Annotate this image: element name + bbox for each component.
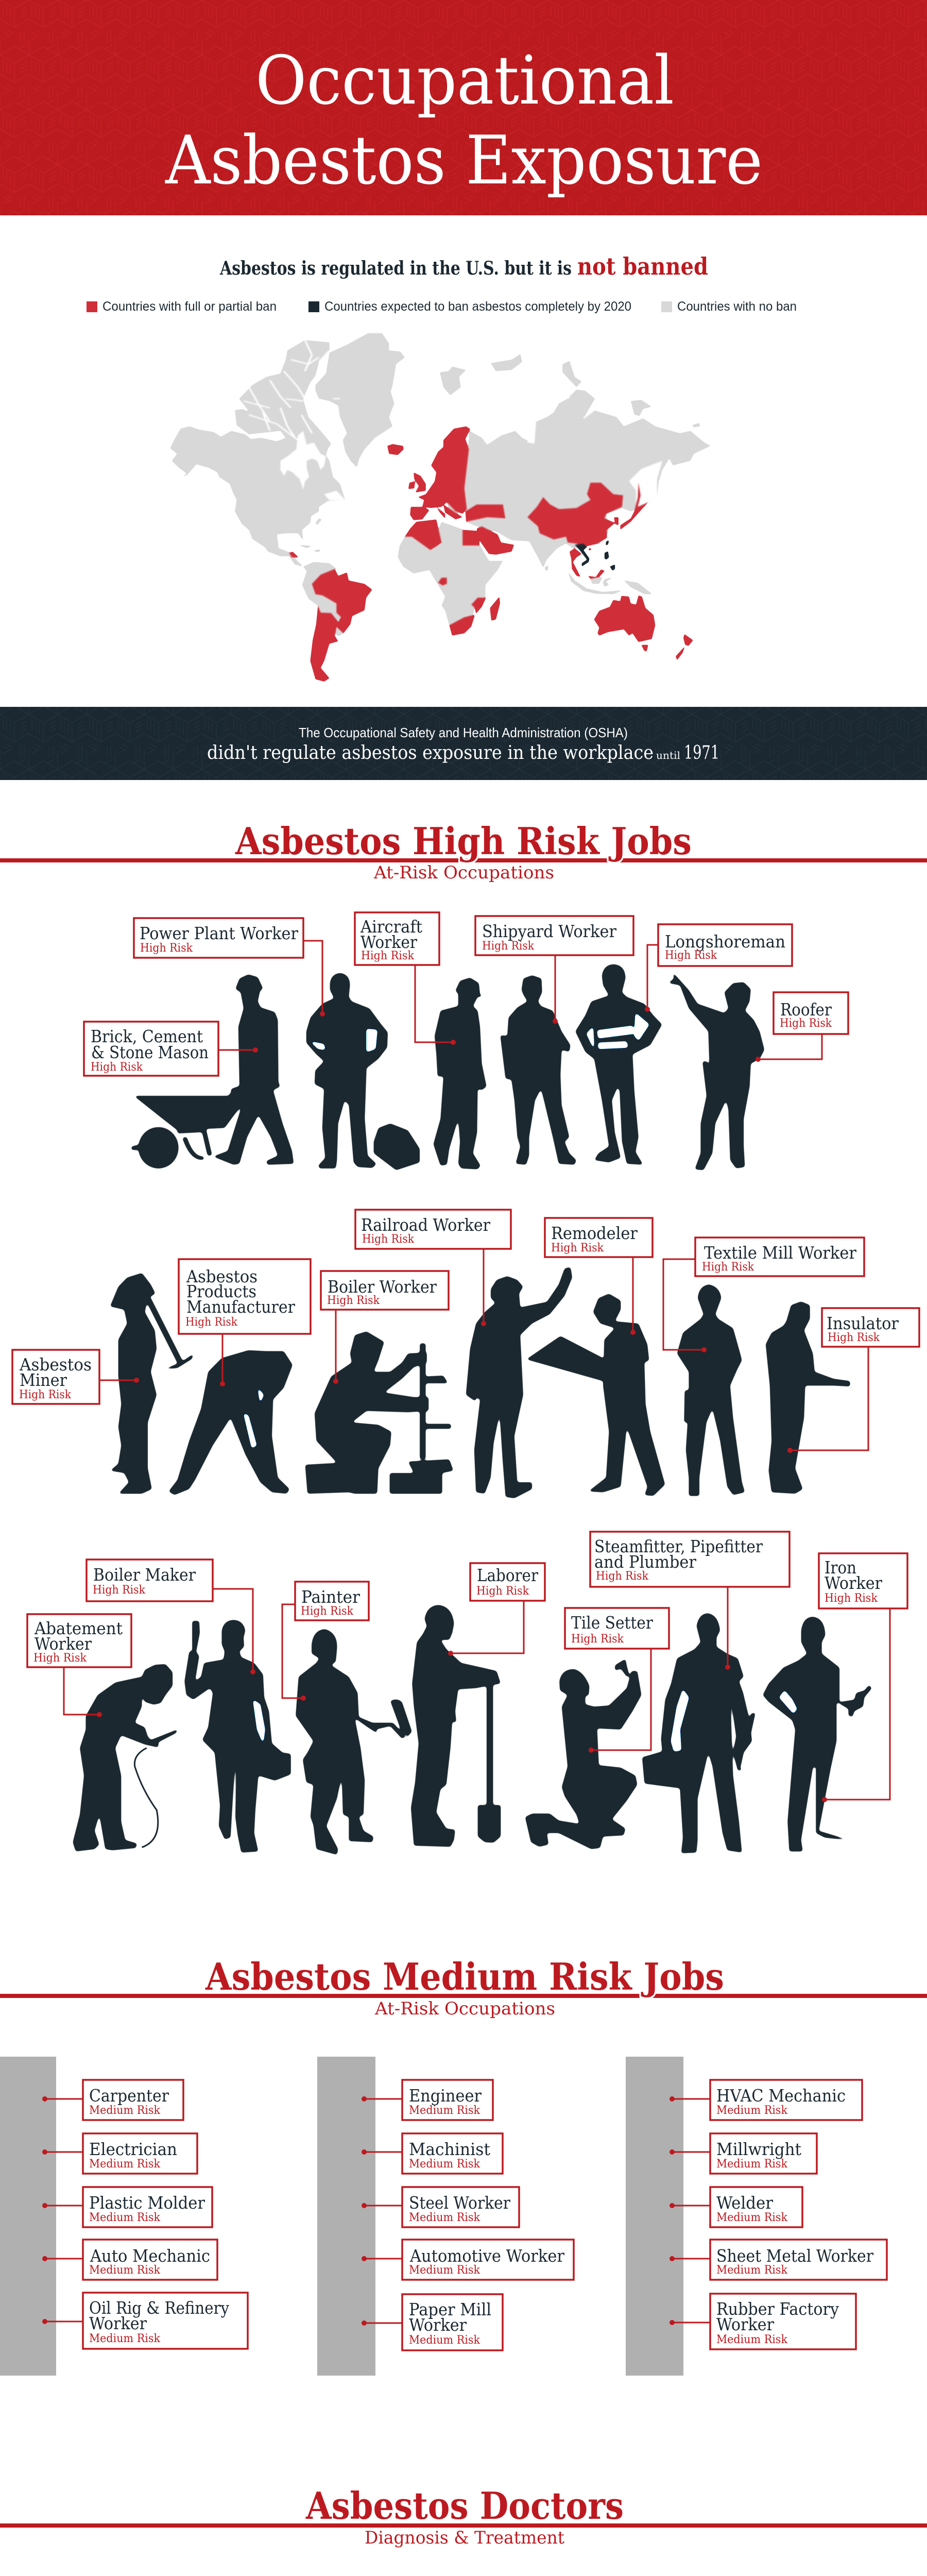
subheading: not banned: not banned bbox=[577, 252, 708, 280]
callout: carpenter: Carpenter bbox=[89, 2086, 169, 2106]
callout: shipyard worker: High Risk bbox=[482, 940, 535, 953]
callout: oil rig and refinery worker: Worker bbox=[89, 2313, 147, 2333]
icon: iron worker bbox=[763, 1617, 872, 1852]
section heading: high risk jobs bbox=[0, 819, 927, 883]
worker silhouettes row 3 bbox=[73, 1605, 872, 1855]
icon: laborer bbox=[411, 1605, 501, 1847]
callout: asbestos miner bbox=[12, 1350, 139, 1404]
section heading: medium risk jobs bbox=[0, 1955, 927, 2019]
section heading: high risk jobs: At-Risk Occupations bbox=[373, 862, 554, 883]
icon: products manufacturer bbox=[168, 1350, 293, 1495]
callout: carpenter bbox=[42, 2080, 183, 2120]
callout: boiler worker: Boiler Worker bbox=[328, 1277, 437, 1297]
callout: brick cement and stone mason: & Stone Mason bbox=[91, 1042, 209, 1062]
title: Asbestos Exposure bbox=[165, 121, 763, 199]
callout: aircraft worker: Worker bbox=[360, 932, 417, 952]
callout: asbestos miner: Asbestos bbox=[19, 1354, 92, 1375]
callout: paper mill worker: Paper Mill bbox=[409, 2299, 491, 2319]
callout: engineer: Engineer bbox=[409, 2086, 482, 2106]
callout: tile setter: Tile Setter bbox=[571, 1613, 653, 1633]
callout: railroad worker bbox=[355, 1210, 511, 1326]
panel: medium risk column 1 bbox=[0, 2057, 248, 2376]
callout: hvac mechanic: Medium Risk bbox=[716, 2104, 788, 2117]
callout: auto mechanic: Auto Mechanic bbox=[90, 2246, 210, 2266]
title bbox=[165, 41, 763, 199]
callout: steel worker: Medium Risk bbox=[409, 2211, 480, 2224]
callout: roofer bbox=[756, 992, 848, 1062]
OSHA banner: 1971 bbox=[684, 742, 719, 764]
callout: steamfitter pipefitter and plumber: and Plumber bbox=[594, 1552, 696, 1572]
callout: brick cement and stone mason: High Risk bbox=[91, 1061, 143, 1074]
callout: iron worker: Worker bbox=[825, 1573, 882, 1593]
callout: paper mill worker: Medium Risk bbox=[409, 2334, 480, 2347]
callout: brick cement and stone mason: Brick, Cement bbox=[91, 1026, 203, 1046]
callout: asbestos products manufacturer: High Risk bbox=[185, 1316, 238, 1329]
callout: remodeler bbox=[545, 1218, 653, 1335]
icon: power plant worker bbox=[306, 973, 388, 1168]
callout: asbestos products manufacturer: Products bbox=[186, 1281, 256, 1301]
callout: millwright: Medium Risk bbox=[716, 2158, 788, 2171]
callout: boiler maker: Boiler Maker bbox=[93, 1565, 196, 1585]
callout: hvac mechanic bbox=[670, 2080, 862, 2120]
callout: auto mechanic bbox=[42, 2240, 217, 2280]
panel: medium risk column 3 bbox=[626, 2057, 887, 2376]
callout: painter: High Risk bbox=[301, 1605, 354, 1618]
callout: welder: Welder bbox=[716, 2193, 773, 2213]
icon: boiler worker bbox=[305, 1331, 454, 1494]
callout: boiler maker: High Risk bbox=[93, 1584, 146, 1597]
callout: machinist: Medium Risk bbox=[409, 2158, 480, 2171]
callout: automotive worker bbox=[362, 2240, 574, 2280]
callout: roofer: High Risk bbox=[780, 1017, 832, 1030]
callout: asbestos products manufacturer: Manufacturer bbox=[186, 1297, 295, 1317]
callout: iron worker: Iron bbox=[825, 1557, 856, 1578]
callout: iron worker bbox=[819, 1553, 907, 1802]
panel: medium risk column 2 bbox=[317, 2057, 574, 2376]
callout: oil rig and refinery worker bbox=[42, 2293, 248, 2349]
icon: boiler maker bbox=[184, 1620, 291, 1853]
callout: steel worker: Steel Worker bbox=[409, 2193, 510, 2213]
callout: oil rig and refinery worker: Oil Rig & Refinery bbox=[89, 2298, 229, 2318]
callout: textile mill worker bbox=[663, 1238, 864, 1352]
callout: welder: Medium Risk bbox=[716, 2211, 788, 2224]
callout: boiler worker: High Risk bbox=[327, 1294, 380, 1307]
icon: painter bbox=[296, 1629, 412, 1855]
callout: brick cement and stone mason bbox=[84, 1022, 258, 1076]
section heading: medium risk jobs: Asbestos Medium Risk Jobs bbox=[205, 1955, 724, 1998]
icon: roofer bbox=[668, 972, 764, 1171]
map legend bbox=[87, 299, 797, 314]
callout: boiler worker bbox=[321, 1271, 449, 1384]
map legend: Countries with full or partial ban bbox=[102, 299, 277, 314]
icon: textile worker bbox=[677, 1284, 745, 1496]
OSHA banner: The Occupational Safety and Health Administration (OSHA) bbox=[299, 725, 628, 740]
callout: insulator: High Risk bbox=[828, 1331, 880, 1344]
callout: steamfitter pipefitter and plumber: Steamfitter, Pipefitter bbox=[594, 1536, 763, 1556]
callout: paper mill worker: Worker bbox=[409, 2315, 467, 2335]
callout: electrician: Electrician bbox=[89, 2139, 177, 2159]
callout: tile setter: High Risk bbox=[571, 1633, 624, 1646]
OSHA banner bbox=[0, 707, 927, 780]
callout: abatement worker: Worker bbox=[35, 1634, 92, 1654]
icon: insulator bbox=[766, 1301, 850, 1494]
callout: sheet metal worker bbox=[670, 2240, 887, 2280]
title: Occupational bbox=[255, 41, 674, 120]
callout: longshoreman bbox=[645, 924, 792, 1012]
callout: roofer: Roofer bbox=[780, 999, 832, 1020]
callout: aircraft worker bbox=[355, 912, 456, 1045]
callout: carpenter: Medium Risk bbox=[89, 2104, 161, 2117]
callout: laborer bbox=[448, 1563, 545, 1656]
callout: longshoreman: High Risk bbox=[665, 949, 717, 962]
callout: steamfitter pipefitter and plumber bbox=[590, 1532, 789, 1670]
icon: aircraft worker bbox=[433, 977, 487, 1170]
icon: mason with wheelbarrow bbox=[131, 974, 294, 1168]
callout: auto mechanic: Medium Risk bbox=[89, 2264, 161, 2277]
callout: rubber factory worker: Rubber Factory bbox=[716, 2299, 839, 2319]
callout: asbestos products manufacturer bbox=[179, 1259, 311, 1386]
callout: shipyard worker: Shipyard Worker bbox=[482, 921, 616, 941]
callout: painter: Painter bbox=[301, 1587, 360, 1607]
worker silhouettes rows 1 and 2 bbox=[110, 964, 850, 1498]
callout: remodeler: High Risk bbox=[551, 1242, 604, 1255]
icon: steamfitter bbox=[642, 1613, 756, 1853]
callout: painter bbox=[282, 1582, 369, 1701]
callout: asbestos miner: Miner bbox=[20, 1370, 67, 1390]
callout: insulator bbox=[787, 1308, 919, 1453]
callout: steel worker bbox=[362, 2187, 519, 2227]
icon: longshoreman bbox=[575, 964, 662, 1165]
callout: sheet metal worker: Medium Risk bbox=[716, 2264, 788, 2277]
callout: millwright bbox=[670, 2133, 817, 2174]
subheading: not banned: Asbestos is regulated in the U.S. but it is bbox=[219, 258, 572, 279]
callout: steamfitter pipefitter and plumber: High Risk bbox=[596, 1570, 649, 1583]
icon: shipyard worker bbox=[500, 975, 576, 1165]
callout: aircraft worker: High Risk bbox=[361, 950, 415, 962]
callout: textile mill worker: Textile Mill Worker bbox=[704, 1243, 856, 1263]
section heading: high risk jobs: Asbestos High Risk Jobs bbox=[235, 819, 692, 863]
callout: power plant worker: Power Plant Worker bbox=[140, 923, 298, 943]
callout: laborer: Laborer bbox=[477, 1565, 538, 1585]
callout: welder bbox=[670, 2187, 802, 2227]
section heading: doctors: Diagnosis & Treatment bbox=[365, 2528, 564, 2548]
callout: plastic molder bbox=[42, 2187, 212, 2227]
world map bbox=[166, 333, 711, 682]
map legend: Countries expected to ban asbestos completely by 2020 bbox=[324, 299, 631, 314]
section heading: medium risk jobs: At-Risk Occupations bbox=[374, 1998, 555, 2019]
callout: rubber factory worker: Medium Risk bbox=[716, 2333, 788, 2346]
callout: engineer: Medium Risk bbox=[409, 2104, 480, 2117]
header banner bbox=[0, 0, 927, 215]
callout: textile mill worker: High Risk bbox=[702, 1261, 754, 1274]
callout: abatement worker: Abatement bbox=[34, 1618, 123, 1638]
callout: abatement worker bbox=[27, 1614, 131, 1717]
callout: tile setter bbox=[565, 1608, 669, 1753]
icon: abatement worker cable bbox=[134, 1748, 158, 1848]
callout: rubber factory worker: Worker bbox=[716, 2314, 774, 2334]
icon: tile setter bbox=[525, 1659, 642, 1849]
callout: railroad worker: High Risk bbox=[362, 1233, 415, 1246]
OSHA banner: until bbox=[656, 749, 680, 761]
icon: toolbox bbox=[374, 1123, 420, 1171]
callout: shipyard worker bbox=[475, 916, 633, 1024]
icon: asbestos miner bbox=[110, 1273, 194, 1494]
callout: electrician bbox=[42, 2133, 197, 2174]
callout: insulator: Insulator bbox=[827, 1313, 899, 1333]
section heading: doctors: Asbestos Doctors bbox=[305, 2484, 624, 2528]
map legend: Countries with no ban bbox=[677, 299, 797, 314]
callout: railroad worker: Railroad Worker bbox=[361, 1215, 490, 1235]
callout: longshoreman: Longshoreman bbox=[665, 931, 785, 952]
callout: laborer: High Risk bbox=[476, 1585, 529, 1598]
callout: millwright: Millwright bbox=[716, 2139, 801, 2159]
callout: oil rig and refinery worker: Medium Risk bbox=[89, 2332, 161, 2345]
callout: plastic molder: Plastic Molder bbox=[89, 2193, 205, 2213]
OSHA banner: didn't regulate asbestos exposure in the workplace bbox=[207, 742, 654, 764]
icon: railroad worker bbox=[466, 1267, 572, 1498]
callout: power plant worker bbox=[134, 918, 325, 1016]
callout: automotive worker: Automotive Worker bbox=[409, 2246, 564, 2266]
callout: asbestos miner: High Risk bbox=[19, 1388, 72, 1401]
callout: abatement worker: High Risk bbox=[33, 1652, 87, 1665]
callout: sheet metal worker: Sheet Metal Worker bbox=[716, 2246, 873, 2266]
callout: machinist bbox=[362, 2133, 503, 2174]
section heading: doctors bbox=[0, 2484, 927, 2548]
callout: electrician: Medium Risk bbox=[89, 2158, 161, 2171]
icon: abatement worker bbox=[73, 1664, 179, 1852]
callout: rubber factory worker bbox=[670, 2294, 856, 2349]
callout: power plant worker: High Risk bbox=[140, 942, 193, 955]
callout: engineer bbox=[362, 2080, 493, 2120]
callout: aircraft worker: Aircraft bbox=[360, 917, 422, 937]
callout: remodeler: Remodeler bbox=[551, 1223, 638, 1243]
icon: remodeler bbox=[526, 1294, 665, 1496]
callout: boiler maker bbox=[87, 1560, 255, 1674]
callout: paper mill worker bbox=[362, 2294, 503, 2350]
callout: plastic molder: Medium Risk bbox=[89, 2211, 161, 2224]
callout: hvac mechanic: HVAC Mechanic bbox=[716, 2086, 846, 2106]
callout: asbestos products manufacturer: Asbestos bbox=[186, 1266, 258, 1286]
callout: iron worker: High Risk bbox=[825, 1592, 878, 1605]
subheading: not banned bbox=[219, 252, 708, 280]
callout: automotive worker: Medium Risk bbox=[409, 2264, 480, 2277]
callout: machinist: Machinist bbox=[409, 2139, 490, 2159]
